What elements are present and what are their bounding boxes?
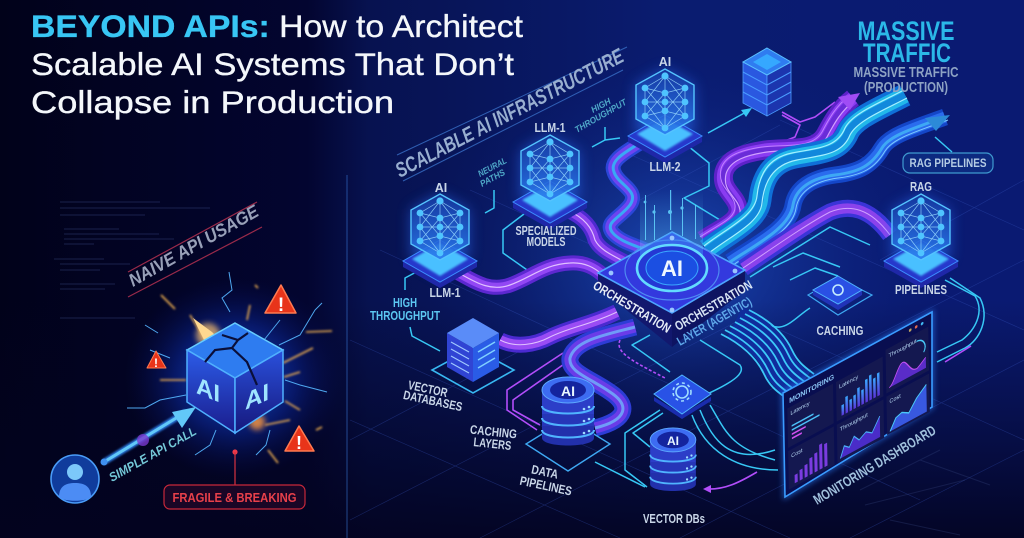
- heading: massive traffic: [854, 16, 959, 96]
- node: RAG: [884, 194, 958, 288]
- icon: user avatar: [51, 455, 99, 503]
- database: AI DB: [526, 377, 610, 471]
- heading: massive traffic: TRAFFIC: [863, 38, 951, 68]
- label: orchestration left: ORCHESTRATION: [590, 278, 674, 336]
- label: naive API usage: NAIVE API USAGE: [125, 201, 263, 290]
- icon: broken AI cube: [187, 323, 283, 433]
- callout: fragile & breaking: FRAGILE & BREAKING: [172, 490, 296, 505]
- node labels: VECTOR: [407, 378, 449, 400]
- panel: latency list: Latency: [790, 401, 810, 417]
- node labels: CACHING: [816, 324, 864, 338]
- flow: LLM-1 to orchestration: [457, 263, 603, 287]
- node: AI LLM-2: [628, 69, 702, 163]
- flow: blue massive traffic: [730, 115, 950, 265]
- flow: cyan massive traffic: [704, 91, 907, 253]
- panel: cost area chart: Cost: [889, 393, 901, 405]
- node labels: AI: [435, 181, 447, 195]
- flow: orchestration to dashboard: [721, 310, 814, 398]
- label: layer agentic: LAYER (AGENTIC): [674, 294, 754, 349]
- panel: latency bar chart: Latency: [839, 375, 858, 391]
- node labels: LLM-1: [534, 121, 566, 135]
- dashboard heading: MONITORING: [789, 372, 834, 405]
- chip: orchestration layer: [598, 190, 745, 347]
- flow: specialized to orchestration: [567, 210, 625, 262]
- chip: gear node: [654, 375, 711, 419]
- label: orchestration right: ORCHESTRATION: [672, 277, 755, 334]
- node labels: MODELS: [526, 235, 566, 249]
- node labels: VECTOR DBs: [643, 512, 705, 526]
- database: vector DBs: AI: [667, 434, 679, 448]
- database: vector DBs: [650, 428, 696, 491]
- chip: caching: [808, 276, 872, 315]
- node labels: HIGH: [393, 295, 417, 310]
- divider: [346, 175, 348, 538]
- icon: warning bottom right: !: [296, 433, 302, 453]
- faint code bottom right: [860, 450, 990, 535]
- server: top stack: [743, 48, 791, 116]
- label: scalable AI infrastructure: SCALABLE AI INFRASTRUCTURE: [392, 44, 628, 182]
- node labels: DATABASES: [402, 388, 464, 414]
- title: Scalable AI Systems That Don’t: [31, 46, 514, 82]
- panel: code background: [54, 201, 210, 319]
- server: vector databases: [432, 318, 514, 393]
- thin connector lines: [405, 102, 984, 493]
- node labels: THROUGHPUT: [573, 96, 629, 135]
- data flow bands: [457, 91, 950, 428]
- icon: warning bottom right: [285, 426, 314, 453]
- panel: latency list: [787, 384, 834, 448]
- node labels: RAG: [910, 180, 932, 194]
- node labels: [370, 55, 947, 526]
- node labels: CACHING: [469, 423, 518, 441]
- node: AI LLM-1: [403, 194, 477, 288]
- title: BEYOND APIs: How to Architect: [31, 8, 523, 44]
- flow: LLM-2 to orchestration: [610, 143, 645, 250]
- icon: warning left: [147, 351, 166, 370]
- node labels: LLM-2: [650, 160, 681, 174]
- node labels: LLM-1: [430, 286, 461, 300]
- icon: warning top right: [265, 285, 296, 316]
- cube glow: [125, 278, 345, 478]
- panel: cost area chart: [886, 373, 930, 435]
- heading: massive traffic: MASSIVE TRAFFIC: [854, 65, 959, 81]
- panel: monitoring dashboard: [783, 312, 932, 497]
- callout: RAG pipelines: [903, 153, 993, 173]
- flow: vector DB to orchestration: [500, 312, 617, 345]
- node labels: SPECIALIZED: [516, 224, 576, 238]
- node labels: PIPELINES: [518, 474, 573, 498]
- node labels: PATHS: [478, 167, 507, 189]
- panel: throughput chart: Throughput: [840, 412, 868, 433]
- icon: broken AI cube: AI: [196, 372, 220, 408]
- node labels: DATA: [530, 462, 559, 482]
- chip: orchestration layer: AI: [661, 256, 683, 281]
- flow: AI DB to orchestration: [570, 327, 635, 428]
- icon: broken AI cube: AI: [245, 378, 269, 416]
- panel: throughput area chart: Throughput: [889, 338, 917, 360]
- label: monitoring dashboard: MONITORING DASHBOARD: [810, 422, 939, 508]
- title: [31, 8, 523, 120]
- node labels: AI: [659, 55, 671, 69]
- database: AI DB: AI: [561, 383, 575, 399]
- callout: RAG pipelines: RAG PIPELINES: [910, 156, 986, 170]
- icon: warning top right: !: [278, 295, 284, 316]
- node labels: LAYERS: [473, 435, 512, 453]
- label: scalable AI infrastructure: [392, 44, 628, 182]
- icon: warning left: !: [154, 356, 158, 370]
- heading: massive traffic: MASSIVE: [858, 16, 954, 46]
- panel: cost bar chart: [788, 426, 835, 490]
- node labels: HIGH: [589, 96, 613, 115]
- sparks and cracks: [127, 272, 332, 463]
- title: Collapse in Production: [31, 84, 394, 120]
- node labels: THROUGHPUT: [370, 308, 440, 323]
- panel: cost bar chart: Cost: [791, 448, 803, 460]
- node labels: PIPELINES: [895, 283, 947, 297]
- panel: throughput area chart: [886, 327, 929, 394]
- flow: purple to RAG: [743, 208, 890, 268]
- heading: massive traffic: (PRODUCTION): [864, 80, 948, 96]
- label: simple API call: SIMPLE API CALL: [107, 424, 199, 485]
- panel: latency bar chart: [836, 357, 883, 422]
- node labels: NEURAL: [476, 155, 508, 179]
- node: specialized models: [513, 135, 587, 229]
- arrow: simple API call: [100, 407, 196, 466]
- callout: fragile & breaking: [164, 449, 305, 509]
- panel: throughput chart: [837, 399, 884, 463]
- flow: purple massive traffic: [700, 93, 860, 242]
